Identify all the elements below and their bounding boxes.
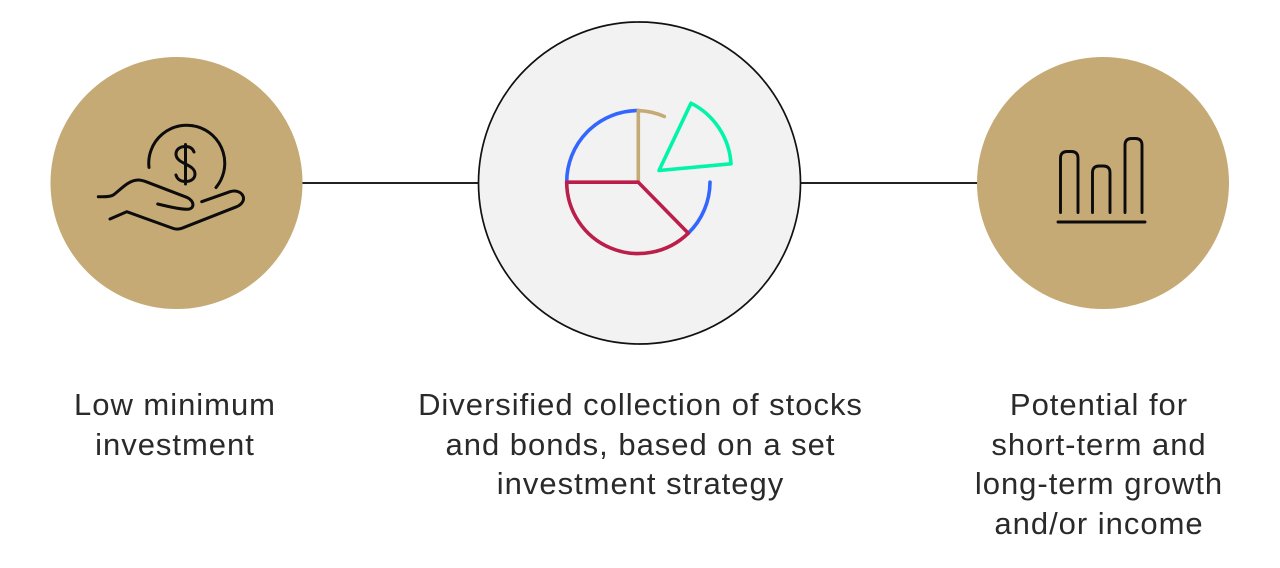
- text: potential for growth description: and/or income: [994, 506, 1204, 541]
- text: diversified collection description: and bonds, based on a set: [446, 427, 835, 462]
- text: potential for growth description: [975, 387, 1223, 541]
- text: diversified collection description: Diversified collection of stocks: [418, 387, 863, 422]
- panel: diversified collection circle: [478, 22, 800, 344]
- text: low minimum investment: investment: [95, 427, 255, 462]
- icon: hand holding coin: [98, 125, 244, 229]
- text: potential for growth description: Potential for: [1010, 387, 1188, 422]
- text: diversified collection description: investment strategy: [497, 466, 784, 501]
- text: low minimum investment: [74, 387, 276, 462]
- icon: pie chart: [567, 103, 731, 254]
- text: low minimum investment: Low minimum: [74, 387, 276, 422]
- text: potential for growth description: long-term growth: [975, 466, 1223, 501]
- panel: low minimum investment circle: [50, 57, 302, 309]
- icon: bar chart: [1058, 138, 1145, 222]
- panel: potential growth circle: [977, 57, 1229, 309]
- text: potential for growth description: short-term and: [991, 427, 1207, 462]
- text: diversified collection description: [418, 387, 863, 501]
